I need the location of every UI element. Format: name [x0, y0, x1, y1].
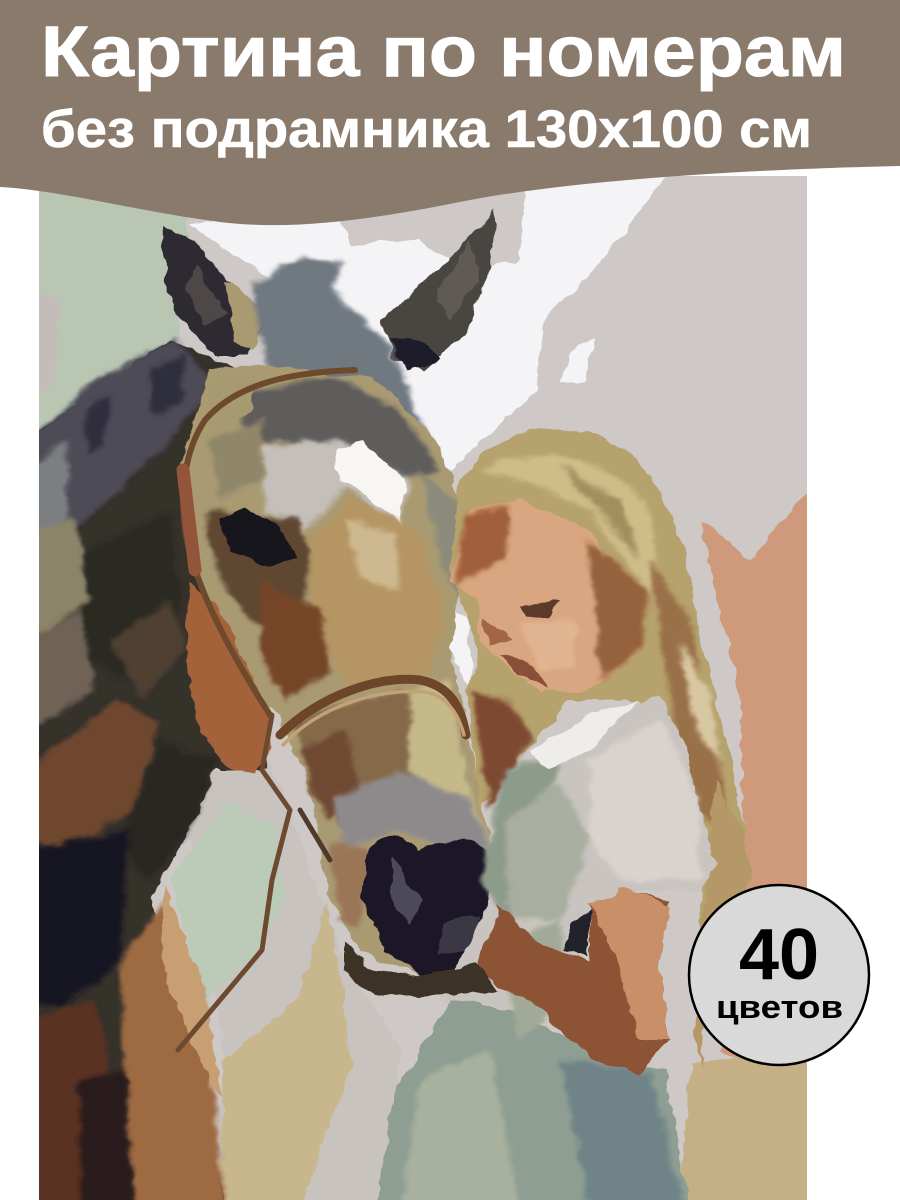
badge number: 40 — [739, 915, 819, 995]
horse bridle — [178, 370, 466, 1050]
horse forelock — [252, 258, 435, 450]
painting background — [30, 170, 820, 1200]
badge: 40 colours — [689, 885, 869, 1065]
horse head — [180, 365, 502, 975]
subtitle: без подрамника 130х100 см — [41, 100, 812, 159]
badge label: цветов — [716, 989, 843, 1025]
girl face — [450, 500, 650, 692]
painting: girl with horse — [30, 170, 820, 1200]
horse ear: left — [163, 224, 265, 355]
title: Картина по номерам — [41, 13, 846, 92]
header band — [0, 0, 900, 225]
girl arm — [345, 888, 672, 1072]
horse muzzle and nostrils — [362, 837, 502, 975]
horse body and neck — [30, 340, 270, 1200]
girl dress — [375, 695, 715, 1200]
horse eye — [218, 505, 295, 565]
horse ear: right — [382, 210, 498, 372]
girl hair — [450, 428, 755, 1070]
